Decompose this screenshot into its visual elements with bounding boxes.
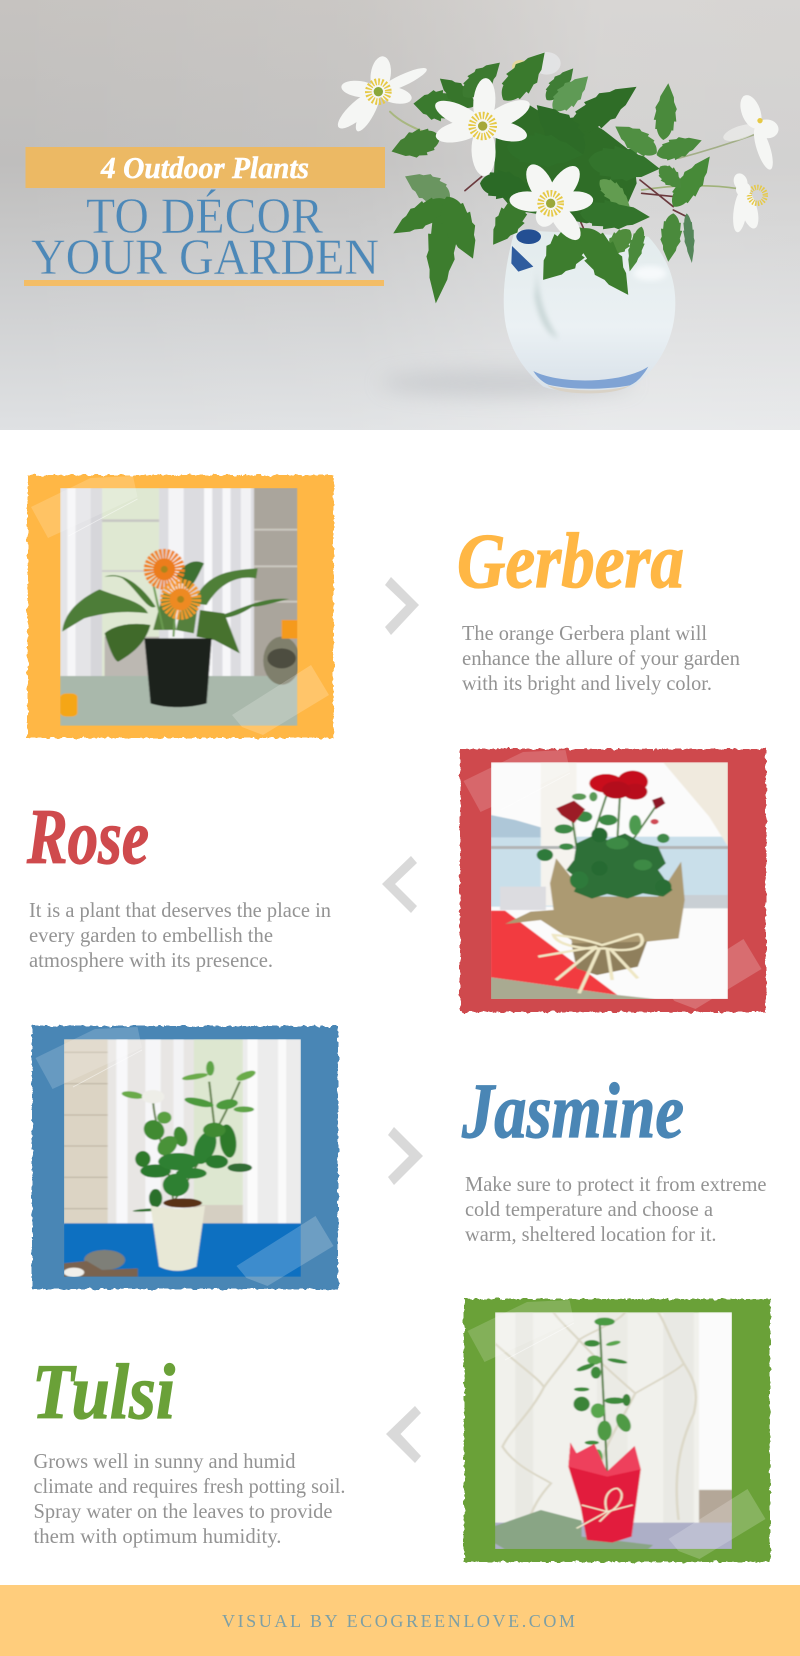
gerbera blooms [151, 556, 177, 582]
arrow: left chevron [386, 1406, 421, 1463]
arrow: left chevron [382, 856, 417, 913]
text: Tulsi description: them with optimum humidity. [34, 1524, 282, 1548]
text: Tulsi description: Spray water on the leaves to provide [34, 1499, 332, 1523]
text: Jasmine description: warm, sheltered location for it. [465, 1222, 716, 1246]
stems [153, 1082, 240, 1205]
title: TO DÉCOR [86, 189, 323, 245]
photo: jasmine plant [64, 1039, 301, 1277]
vase [504, 230, 675, 392]
text: Rose description: atmosphere with its presence. [29, 948, 273, 972]
title ribbon [26, 147, 385, 188]
pot [151, 1206, 205, 1271]
text: Rose description: It is a plant that deserves the place in [29, 898, 331, 922]
leaves [387, 43, 719, 305]
text: Jasmine description: Make sure to protect it from extreme [465, 1172, 766, 1196]
ribbon text: 4 Outdoor Plants [100, 150, 309, 185]
rose stems [571, 793, 656, 847]
panel: Tulsi photo frame [464, 1299, 770, 1562]
arrow: right chevron [388, 1127, 423, 1185]
photo: tulsi plant [495, 1312, 732, 1549]
red wrapped pot [568, 1443, 641, 1543]
twine bow [577, 1488, 633, 1528]
text: Gerbera description: with its bright and lively color. [462, 671, 712, 695]
panel: Jasmine photo frame [32, 1026, 338, 1289]
green cloth [495, 1510, 653, 1549]
footer text: VISUAL BY ECOGREENLOVE.COM [222, 1611, 575, 1631]
tape strips [464, 750, 762, 1009]
leaves [573, 1318, 634, 1464]
text: Gerbera description [462, 621, 740, 695]
panel: Rose photo frame [460, 749, 766, 1012]
stems [390, 112, 753, 232]
photo: rose plant [491, 762, 728, 999]
tape strips [36, 1027, 334, 1286]
rose blooms [589, 774, 623, 793]
title [31, 189, 379, 286]
footer bar [0, 1585, 800, 1656]
text: Gerbera description: The orange Gerbera plant will [462, 621, 707, 645]
title: YOUR GARDEN [31, 230, 379, 286]
text: Tulsi description [34, 1449, 346, 1548]
icon: flowers in a white vase [333, 43, 780, 397]
raffia bow [538, 934, 642, 993]
arrow: right chevron [385, 577, 419, 635]
faded background flower [533, 52, 561, 75]
text: Gerbera description: enhance the allure of your garden [462, 646, 740, 670]
text: Rose description: every garden to embellish the [29, 923, 273, 947]
soil [163, 1198, 202, 1208]
title underline [24, 280, 384, 286]
text: Jasmine description [465, 1172, 766, 1246]
leaves [62, 561, 289, 662]
leaves [120, 1061, 258, 1212]
photo: gerbera plant [60, 488, 300, 726]
text: Rose description [29, 898, 331, 972]
text: Tulsi description: climate and requires fresh potting soil. [34, 1474, 346, 1498]
panel: Gerbera photo frame [28, 475, 334, 738]
pot [144, 638, 212, 707]
heading: Jasmine: Jasmine [461, 1067, 684, 1154]
heading: Tulsi: Tulsi [32, 1348, 175, 1435]
white anemone blossoms [333, 55, 780, 245]
heading: Rose: Rose [26, 793, 149, 880]
foliage [537, 792, 672, 899]
burlap wrap [505, 858, 686, 944]
text: Tulsi description: Grows well in sunny and humid [34, 1449, 296, 1473]
heading: Gerbera: Gerbera [457, 517, 684, 604]
stem [599, 1318, 607, 1472]
tape strips [31, 476, 329, 735]
text: Jasmine description: cold temperature and choose a [465, 1197, 714, 1221]
panel: hero photo [0, 0, 800, 430]
tape strips [468, 1300, 766, 1559]
